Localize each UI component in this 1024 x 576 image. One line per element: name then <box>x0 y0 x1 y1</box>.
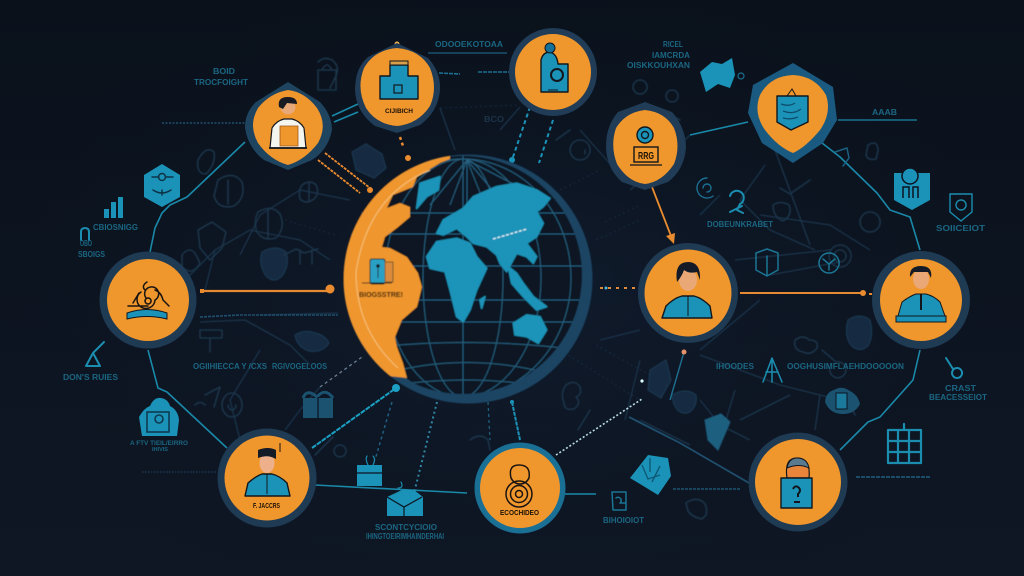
icon: dim circle lower left <box>222 393 242 417</box>
label: left side: OBO <box>80 239 92 248</box>
label: left side second: SBOIGS <box>78 250 106 259</box>
Madagascar <box>480 297 485 308</box>
label: lower left row: OGIIHIECCA Y /CXS <box>193 362 268 371</box>
arrow: line below node 11 left <box>673 488 740 490</box>
arrow: teal link node 11 to node 7 <box>840 350 920 450</box>
node ring <box>509 28 597 116</box>
text labels <box>63 40 987 541</box>
Americas crescent <box>342 155 451 379</box>
arrow: node 3 to globe dashed <box>512 107 553 163</box>
icon: person <box>662 262 712 318</box>
label: puzzle: A FTV TIEIL/EIRRO <box>130 441 188 447</box>
label: lower right second: BEACESSEIOT <box>929 393 987 402</box>
node ring <box>245 82 332 170</box>
arrow: dotted line node 8 lower <box>200 315 338 317</box>
node label: ECOCHIDEO <box>500 510 539 517</box>
label: puzzle second: IHIVIS <box>152 447 169 453</box>
arrow: teal ring path upper left <box>150 142 245 252</box>
icon: swirl <box>127 282 169 319</box>
crescent highlight <box>356 170 430 368</box>
arrow: link node 5 right <box>838 119 917 121</box>
node 5: shield pennant <box>748 63 837 163</box>
icon: dim key <box>780 119 820 194</box>
node disc <box>360 48 434 126</box>
icon: teal hexagon bottom <box>630 455 671 495</box>
arrow: dotted link node 9 left <box>142 471 217 473</box>
icon: shield and box: RRG <box>638 151 654 162</box>
icon: cloud lock <box>825 388 860 414</box>
icon: person at desk <box>896 266 946 322</box>
icon: question box <box>781 458 812 508</box>
icon: teal box <box>387 482 423 516</box>
icon: dim gear stack top <box>318 58 337 88</box>
connectors <box>142 42 930 497</box>
label: far right: SOIICEIOT <box>936 224 985 233</box>
node disc <box>755 439 841 525</box>
node 3: bottle figure <box>509 28 597 116</box>
icon: dim badge <box>860 212 880 232</box>
arrow: teal link right of node 10 <box>565 493 596 495</box>
icon: map pin <box>946 358 962 378</box>
icon: dim brain center left <box>255 208 282 239</box>
icon: dim wrench lower left <box>315 437 346 457</box>
node disc <box>644 250 732 336</box>
node ring <box>638 243 738 343</box>
icon: dim gift <box>303 392 333 418</box>
icon: coin figure <box>506 465 532 507</box>
node disc <box>253 90 323 165</box>
label: lower right row: IHOODES <box>716 362 755 371</box>
globe grid <box>340 156 590 397</box>
icon: diamond <box>705 414 730 450</box>
node ring <box>218 428 316 528</box>
label: lower right: CRAST <box>945 384 976 393</box>
label: gift box second: IHINGTOEIRIMHAINDERHAI <box>366 532 444 541</box>
label: shield line: AAAB <box>872 108 897 117</box>
node 6: woman in jacket <box>638 243 738 343</box>
globe label: BIOGSSTRE! <box>359 292 403 299</box>
background network lines <box>185 105 870 445</box>
arrow: orange-teal dashes globe to node 6 <box>600 287 636 289</box>
icon: dim box <box>200 330 222 352</box>
icon: teal shield face <box>894 168 930 210</box>
icon: dim face right <box>846 316 872 350</box>
node ring <box>748 432 848 532</box>
node disc <box>613 110 678 184</box>
label: top right: RICEL <box>663 40 683 49</box>
icon: teal hexagon <box>144 164 180 207</box>
arrow: node 10 white dotted <box>556 399 642 455</box>
icon: dim cloud right <box>795 337 846 378</box>
icon: dim seal right <box>773 202 851 267</box>
icon: person <box>245 443 290 496</box>
arrow: link node 1 right upper <box>332 104 358 122</box>
node 10: coin figure <box>474 442 566 534</box>
icon: dim pennant <box>198 222 226 260</box>
label: rules: DON'S RUIES <box>63 373 119 382</box>
node ring <box>100 252 196 348</box>
icon: dim brain left <box>214 175 243 207</box>
arrow: node 10 to globe dashed <box>512 402 520 440</box>
icon: box outline <box>756 249 778 276</box>
label: gift box: SCONTCYCIOIO <box>375 523 437 532</box>
node ring <box>474 442 566 534</box>
icon: small dim oval <box>686 499 706 519</box>
node disc <box>515 34 591 110</box>
arrow: dim dashed to node 9 <box>375 402 392 460</box>
icon: small dashed pin <box>835 148 849 166</box>
arrow: dashed link node 11 right <box>856 476 930 478</box>
arrow: pale dashed lower left of globe <box>320 357 362 387</box>
icon: small ring top right <box>738 73 744 79</box>
globe outer ring <box>344 154 592 404</box>
arrow: orange dots node 2 to globe <box>400 137 403 146</box>
arrow: orange link node 6 to node 7 <box>740 292 863 294</box>
icon: outline shield <box>950 194 972 221</box>
icon: building <box>380 61 418 99</box>
icon: dim pin <box>866 143 878 160</box>
node 8: swirl and wave <box>100 252 196 348</box>
globe ocean <box>344 156 582 394</box>
label: chart caption: CBIOSNIGG <box>93 223 138 232</box>
icon: dim flower <box>672 391 696 413</box>
node label: F. JACCRS <box>253 503 280 510</box>
node 4: shield and register <box>606 102 686 190</box>
Africa <box>427 238 487 322</box>
dim background icons <box>182 58 880 519</box>
icon: building grid <box>888 424 921 463</box>
icon: dim leaf <box>198 150 214 174</box>
icon: swirl outline <box>730 191 744 213</box>
icon: puzzle seal <box>139 398 179 436</box>
icon: dim map cloud <box>295 331 329 351</box>
arrow: orange arrow node 4 to node 6 <box>652 187 675 244</box>
icon: bar chart <box>104 197 123 218</box>
icon: tent <box>763 358 782 382</box>
arrow: dotted link node 1 left <box>162 122 245 124</box>
icon: arch <box>81 228 89 240</box>
icon: dim scroll <box>284 249 318 264</box>
icon: teal gift <box>357 456 382 486</box>
icon: ring outline <box>697 178 713 198</box>
connector nodes <box>200 42 872 404</box>
arrow: teal ring path lower left <box>148 350 227 448</box>
arrow: teal link node 5 to node 7 <box>822 143 920 250</box>
icon: dim ball lower <box>470 410 590 450</box>
arrow: orange link node 8 <box>204 290 328 292</box>
label: top center: ODOOEKOTOAA <box>435 40 503 49</box>
arrow: teal link node 9 to node 10 <box>315 485 467 493</box>
node 11: figure with question box <box>748 432 848 532</box>
label: document: BIHOIOIOT <box>603 516 644 525</box>
node 9: man in suit <box>218 428 316 528</box>
Greenland <box>417 177 440 208</box>
icon: dim person <box>182 250 200 271</box>
arrow: pale dashed to box <box>413 402 437 497</box>
label: right center: DOBEUNKRABET <box>707 220 773 229</box>
icon: dim lock cluster top left <box>318 65 336 90</box>
icon: dim trophy <box>299 182 318 202</box>
label: faint center: BCO <box>484 115 504 124</box>
node disc <box>107 259 189 341</box>
arrow: teal dashed node 9 to globe <box>312 388 396 448</box>
node ring <box>355 43 440 133</box>
label: top left pair: BOID <box>213 67 235 76</box>
Australia <box>513 315 547 343</box>
icon: dim bird <box>195 387 220 407</box>
icon: dim lock near globe <box>352 144 386 178</box>
label: top right second: IAMCRDA <box>652 51 690 60</box>
Southeast Asia islands <box>508 267 547 310</box>
label: lower left row second: RGIVOGELOOS <box>272 362 328 371</box>
node 2: building <box>355 43 440 133</box>
node 1: person with vest <box>245 82 332 170</box>
icon: figure with document <box>541 43 568 92</box>
arrow: long link into node 11 <box>629 417 749 483</box>
node disc <box>757 75 828 153</box>
node label: CIJIBICH <box>385 108 413 115</box>
icon: pennant <box>777 89 808 130</box>
icon: triangle marker <box>86 342 104 366</box>
icon: person <box>269 97 307 148</box>
Eurasia <box>437 183 550 272</box>
globe <box>330 150 592 404</box>
node disc <box>224 436 310 520</box>
node disc <box>480 448 560 528</box>
arrow: link node 5 left <box>690 122 748 135</box>
node disc <box>880 259 962 341</box>
icon: small document <box>612 492 626 510</box>
label: top right third: OISKKOUHXAN <box>627 61 690 70</box>
icon: dim lock right of globe <box>570 140 590 160</box>
satellite icons <box>81 58 972 516</box>
node ring <box>872 251 970 349</box>
icon: dim cluster near node 11 <box>775 395 855 440</box>
icon: map puzzle <box>700 58 735 92</box>
node ring <box>606 102 686 190</box>
node ring <box>748 63 837 163</box>
icon: dim person top right <box>556 80 680 140</box>
arrow: orange double link to globe <box>318 153 370 193</box>
icon: door on globe <box>362 259 393 284</box>
Asia route highlight <box>493 229 527 239</box>
icon: dim shield center right <box>648 360 671 398</box>
node 7: man at desk <box>872 251 970 349</box>
icon: circle with y <box>819 253 839 273</box>
icon: dim brain right of bottom node <box>562 382 580 409</box>
icon: dim seal <box>261 248 287 280</box>
arrow: line under top label <box>428 52 507 54</box>
label: top left second line: TROCFOIGHT <box>194 78 248 87</box>
label: lower right row second: OOGHUSIMFLAEHDOOOOON <box>787 362 904 371</box>
arrow: orange line bottom of globe <box>670 352 684 400</box>
arrow: link node 2 to node 3 <box>439 72 510 74</box>
